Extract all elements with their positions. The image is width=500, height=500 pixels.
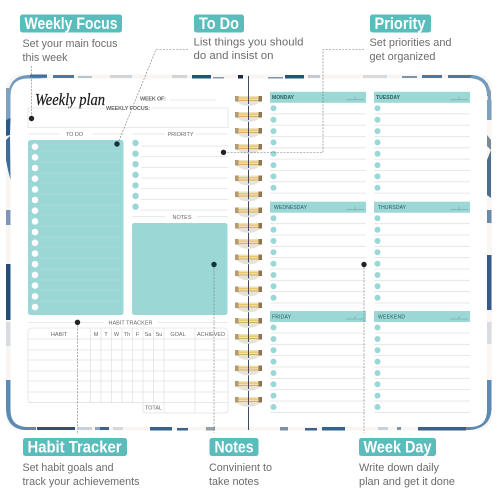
habit tracker table: Sa <box>145 332 152 338</box>
weekly focus box: WEEKLY FOCUS: <box>106 106 150 112</box>
callout: week day: plan and get it done <box>359 476 455 488</box>
priority heading <box>132 132 228 138</box>
callout: weekly focus <box>20 14 122 64</box>
weekend panel: WEEKEND <box>378 314 405 320</box>
callout: priority: Set priorities and <box>370 37 452 49</box>
leader: week day <box>361 262 367 433</box>
callout: habit tracker: Set habit goals and <box>22 462 114 474</box>
week of field <box>140 96 216 102</box>
habit tracker table: M <box>94 332 99 338</box>
habit tracker heading: HABIT TRACKER <box>108 320 153 326</box>
right page <box>249 78 487 427</box>
callout: weekly focus: Weekly Focus <box>24 15 118 33</box>
tuesday panel <box>374 92 470 193</box>
leader: priority <box>221 50 364 155</box>
thursday panel <box>374 202 470 303</box>
callout: notes: Notes <box>214 438 254 456</box>
weekly focus box <box>28 106 228 128</box>
weekend panel <box>374 311 470 412</box>
leader: to do <box>114 50 188 147</box>
priority list <box>132 140 228 210</box>
monday panel: MONDAY <box>272 95 295 101</box>
callout: habit tracker: Habit Tracker <box>28 438 122 456</box>
habit tracker table: HABIT <box>51 332 68 338</box>
callout: habit tracker <box>22 438 140 488</box>
callout: to do: do and insist on <box>194 50 274 62</box>
spine <box>248 76 250 430</box>
habit tracker table: TOTAL <box>145 406 162 412</box>
leader: habit tracker <box>75 320 80 433</box>
callout: week day <box>359 438 455 488</box>
wednesday panel <box>270 202 366 303</box>
habit tracker table: W <box>114 332 120 338</box>
friday panel: FRIDAY <box>272 314 292 320</box>
callout: priority: get organized <box>370 51 436 63</box>
planner title: Weekly plan <box>35 90 105 109</box>
notes panel <box>132 223 228 315</box>
spiral binding <box>235 96 262 407</box>
monday panel <box>270 92 366 193</box>
callout: habit tracker: track your achievements <box>22 476 140 488</box>
habit tracker table: Th <box>124 332 130 338</box>
habit tracker table: GOAL <box>170 332 186 338</box>
thursday panel: THURSDAY <box>378 205 407 211</box>
callout: notes <box>209 438 272 488</box>
habit tracker table: Su <box>156 332 162 338</box>
habit tracker table: T <box>104 332 108 338</box>
friday panel <box>270 311 366 412</box>
to do heading <box>28 132 124 138</box>
callout: priority: Priority <box>374 15 426 33</box>
habit tracker table <box>28 328 228 413</box>
to do panel <box>28 140 124 315</box>
wednesday panel: WEDNESDAY <box>274 205 308 211</box>
notes heading: NOTES <box>172 215 192 221</box>
callout: weekly focus: Set your main focus <box>22 38 118 50</box>
tuesday panel: TUESDAY <box>376 95 401 101</box>
callout: priority <box>370 14 452 63</box>
priority heading: PRIORITY <box>168 132 194 138</box>
callout: week day: Write down daily <box>359 462 439 474</box>
to do heading: TO DO <box>66 132 84 138</box>
callout: weekly focus: this week <box>22 52 68 64</box>
callout: to do: To Do <box>199 15 239 33</box>
habit tracker table: ACHIEVED <box>197 332 225 338</box>
leader: notes <box>211 262 217 433</box>
callout: to do: List things you should <box>194 36 304 48</box>
notes heading <box>132 215 228 221</box>
callout: notes: take notes <box>209 476 259 488</box>
notebook cover <box>6 74 492 430</box>
callout: notes: Convinient to <box>209 462 272 474</box>
habit tracker table: F <box>136 332 140 338</box>
week of field: WEEK OF: <box>140 96 166 102</box>
callout: to do <box>194 14 304 62</box>
leader: weekly focus <box>29 66 34 121</box>
callout: week day: Week Day <box>364 438 432 456</box>
left page <box>10 78 248 427</box>
